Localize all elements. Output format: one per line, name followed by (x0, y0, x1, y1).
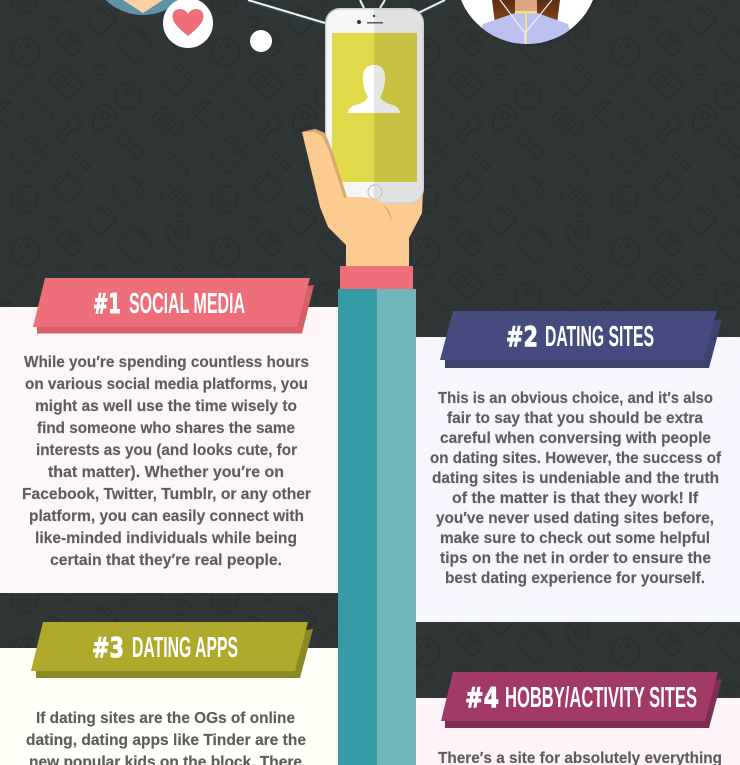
panel: dating apps background (0, 648, 338, 765)
heading: #1 social media (33, 278, 314, 334)
small white dot (250, 30, 272, 52)
text block: social media: platform, you can easily connect with (29, 508, 304, 525)
panel: dating sites background (416, 337, 740, 622)
sleeve cuff (340, 266, 413, 289)
text block: social media: interests as you (and looks cute, for (36, 442, 297, 459)
text block: social media: find someone who shares the same (37, 420, 295, 437)
text block: social media (22, 354, 311, 569)
text block: dating sites: careful when conversing with people (440, 430, 711, 447)
text block: dating sites: fair to say that you should be extra (447, 410, 703, 427)
phone camera and speaker (357, 15, 383, 24)
arm sleeve (338, 289, 416, 765)
text block: social media: on various social media platforms, you (25, 376, 308, 393)
heading: #3 dating apps: DATING APPS (132, 632, 238, 664)
text block: dating apps: If dating sites are the OGs of online (36, 710, 295, 727)
text block: dating sites: make sure to check out some helpful (440, 530, 710, 547)
text block: dating apps (26, 710, 306, 765)
text block: dating sites: best dating experience for yourself. (445, 570, 705, 587)
text block: dating sites: you′ve never used dating sites before, (436, 510, 714, 527)
heading: #1 social media: #1 (93, 287, 121, 320)
text block: social media: While you′re spending countless hours (24, 354, 309, 371)
panel: social media background (0, 307, 338, 593)
hand holding phone (302, 129, 409, 267)
avatar: woman, top right (461, 0, 593, 44)
text block: dating sites (430, 390, 722, 587)
heading: #1 social media: SOCIAL MEDIA (129, 288, 245, 320)
icon: profile silhouette (348, 65, 400, 113)
text block: social media: like-minded individuals while being (35, 530, 297, 547)
heading: #2 dating sites (440, 311, 722, 368)
heading: #3 dating apps (31, 622, 313, 678)
text block: dating sites: on dating sites. However, the success of (430, 450, 722, 467)
text block: social media: certain that they′re real people. (50, 552, 282, 569)
panel: hobby sites background (416, 698, 740, 765)
text block: social media: that matter). Whether you′re on (48, 464, 284, 481)
phone (325, 8, 424, 204)
phone screen (332, 33, 417, 182)
text block: dating sites: of the matter is that they work! If (452, 490, 699, 507)
text block: dating sites: This is an obvious choice, and it′s also (438, 390, 713, 407)
text block: social media: Facebook, Twitter, Tumblr, or any other (22, 486, 311, 503)
phone home button (368, 185, 382, 199)
icon: heart bubble (163, 0, 213, 48)
heading: #3 dating apps: #3 (92, 631, 124, 664)
connector lines from phone to contacts (248, 0, 445, 25)
heading: #2 dating sites: #2 (506, 320, 538, 353)
back of hand behind phone (360, 190, 423, 267)
text block: dating sites: dating sites is undeniable and the truth (432, 470, 719, 487)
heading: #2 dating sites: DATING SITES (545, 321, 654, 353)
heading: #4 hobby/activity sites: #4 (465, 681, 499, 714)
heading: #4 hobby/activity sites (441, 672, 722, 728)
text block: dating sites: tips on the net in order to ensure the (440, 550, 711, 567)
text block: dating apps: dating, dating apps like Tinder are the (26, 732, 306, 749)
avatar: man, top left (106, 0, 178, 15)
text block: social media: might as well use the time wisely to (35, 398, 297, 415)
